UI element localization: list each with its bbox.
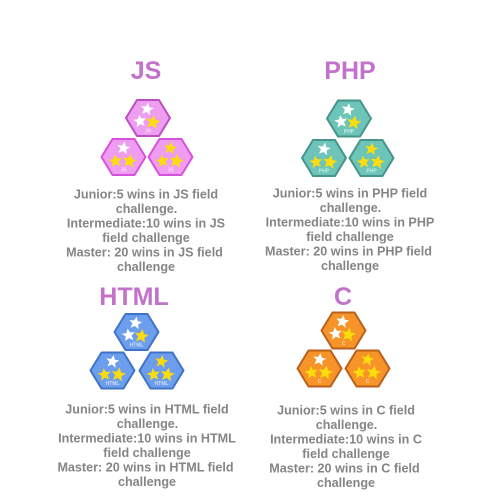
text: HTML requirements: Intermediate:10 wins in HTML xyxy=(58,432,236,446)
text: C requirements: Master: 20 wins in C field xyxy=(269,462,420,476)
text: PHP requirements: Intermediate:10 wins in PHP xyxy=(266,216,434,230)
badge: HTML intermediate xyxy=(90,352,134,388)
text: PHP requirements: Junior:5 wins in PHP field xyxy=(273,186,427,200)
text: PHP requirements: Master: 20 wins in PHP field xyxy=(265,244,432,258)
text: JS requirements: challenge xyxy=(117,260,175,274)
badge: HTML junior xyxy=(114,314,158,350)
text: PHP requirements xyxy=(265,186,434,273)
badge: C master: C xyxy=(366,379,370,385)
text: JS requirements: Intermediate:10 wins in JS xyxy=(67,216,225,230)
badge: PHP junior: PHP xyxy=(344,129,355,135)
text: C requirements: Junior:5 wins in C field xyxy=(277,404,415,418)
text: HTML requirements: Junior:5 wins in HTML field xyxy=(65,402,229,416)
badge: JS junior xyxy=(126,100,170,136)
badge: JS master: JS xyxy=(167,168,174,174)
text: JS requirements: field challenge xyxy=(102,231,190,245)
panel: PHP xyxy=(265,57,434,273)
text: HTML requirements: challenge. xyxy=(117,417,178,431)
text: PHP requirements: field challenge xyxy=(306,230,394,244)
text: JS requirements: challenge. xyxy=(116,202,177,216)
text: C requirements: challenge. xyxy=(316,418,377,432)
text: C requirements: Intermediate:10 wins in C xyxy=(270,432,422,446)
badge: JS junior: JS xyxy=(145,128,152,134)
badge: PHP intermediate: PHP xyxy=(319,168,330,174)
title: HTML: HTML xyxy=(99,283,169,311)
badge: HTML junior: HTML xyxy=(130,342,143,348)
badge: PHP master: PHP xyxy=(366,168,377,174)
text: HTML requirements: challenge xyxy=(118,475,176,489)
text: PHP requirements: challenge xyxy=(321,259,379,273)
panel: HTML xyxy=(57,283,236,489)
badge: C junior: C xyxy=(342,341,346,347)
text: HTML requirements xyxy=(57,402,236,489)
panel: JS xyxy=(66,57,225,274)
text: HTML requirements: Master: 20 wins in HTML field xyxy=(57,460,234,474)
text: HTML requirements: field challenge xyxy=(103,446,191,460)
title: PHP: PHP xyxy=(324,57,376,85)
badge: PHP master xyxy=(350,140,394,176)
text: C requirements xyxy=(269,404,422,490)
badge: C master xyxy=(346,350,390,386)
text: PHP requirements: challenge. xyxy=(320,201,381,215)
badge: HTML master xyxy=(140,352,184,388)
badge: PHP intermediate xyxy=(302,140,346,176)
title: C: C xyxy=(334,283,352,311)
badge: HTML intermediate: HTML xyxy=(106,381,119,387)
badge: PHP junior xyxy=(327,100,371,136)
text: C requirements: field challenge xyxy=(302,447,390,461)
badge: C intermediate xyxy=(298,350,342,386)
text: C requirements: challenge xyxy=(317,476,375,490)
text: JS requirements: Master: 20 wins in JS field xyxy=(66,246,223,260)
badge: JS intermediate xyxy=(102,139,146,175)
badge: HTML master: HTML xyxy=(155,381,168,387)
badge: JS master xyxy=(148,139,192,175)
badge: C intermediate: C xyxy=(318,379,322,385)
badge: JS intermediate: JS xyxy=(120,168,127,174)
text: JS requirements: Junior:5 wins in JS field xyxy=(74,188,218,202)
title: JS: JS xyxy=(131,57,161,85)
panel: C xyxy=(269,283,422,490)
badge: C junior xyxy=(322,312,366,348)
text: JS requirements xyxy=(66,188,225,274)
